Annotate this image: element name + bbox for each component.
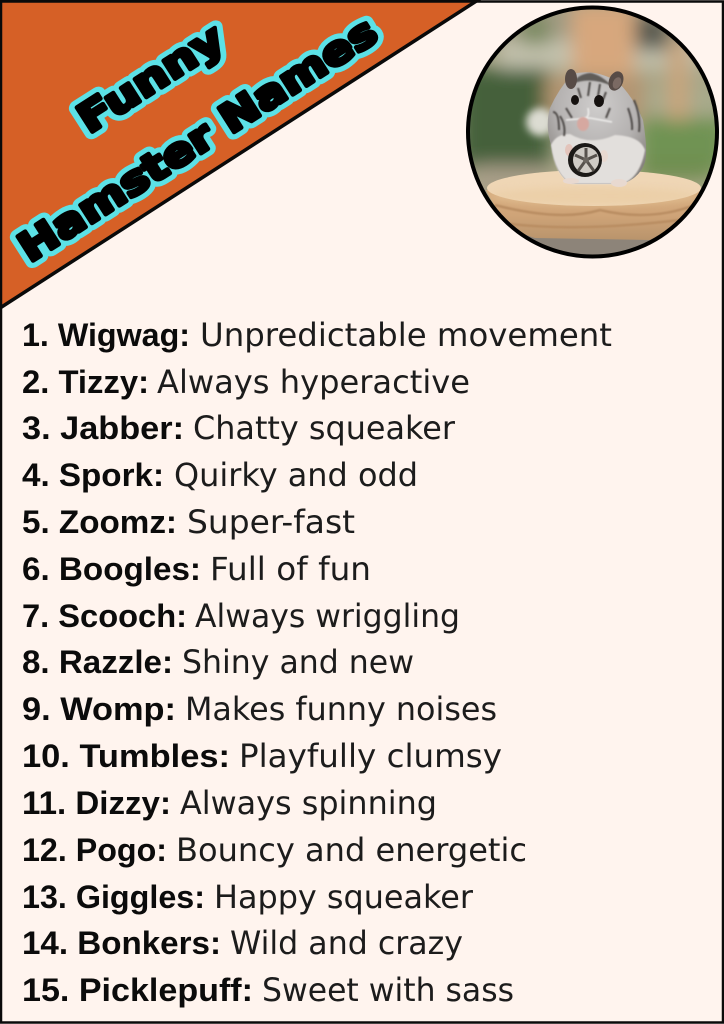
item 1: 1. Wigwag: <box>22 317 190 353</box>
item 9: Makes funny noises <box>185 690 497 728</box>
item 6: Full of fun <box>210 550 371 588</box>
title <box>10 9 386 271</box>
item 15: Sweet with sass <box>262 971 514 1009</box>
photo background <box>470 10 715 208</box>
item 4: Quirky and odd <box>174 456 418 494</box>
eyes and nose <box>571 95 604 131</box>
photo: hamster on a wooden platform <box>460 0 724 265</box>
item 6 <box>22 550 371 588</box>
item 2: Always hyperactive <box>157 363 470 401</box>
item 4 <box>22 456 418 494</box>
item 9: 9. Womp: <box>22 691 176 727</box>
item 7 <box>22 597 460 635</box>
item 8: Shiny and new <box>182 643 414 681</box>
item 7: 7. Scooch: <box>22 598 187 634</box>
hamster <box>548 69 646 187</box>
item 6: 6. Boogles: <box>22 551 201 587</box>
title line: Hamster Names: Hamster Names <box>10 9 386 271</box>
paws and feet <box>563 144 627 187</box>
item 13 <box>22 878 474 916</box>
item 2: 2. Tizzy: <box>22 364 149 400</box>
item 5: Super-fast <box>187 503 355 541</box>
item 1 <box>22 316 612 354</box>
list of hamster names <box>22 316 612 1009</box>
item 1: Unpredictable movement <box>200 316 612 354</box>
item 14: Wild and crazy <box>230 924 463 962</box>
ears <box>565 69 624 91</box>
item 9 <box>22 690 497 728</box>
item 12: Bouncy and energetic <box>176 831 527 869</box>
item 15 <box>22 971 514 1009</box>
wooden platform <box>486 170 702 262</box>
item 15: 15. Picklepuff: <box>22 972 253 1008</box>
item 4: 4. Spork: <box>22 457 164 493</box>
item 13: 13. Giggles: <box>22 879 205 915</box>
item 10: 10. Tumbles: <box>22 738 230 774</box>
item 14 <box>22 924 463 962</box>
toy wheel <box>568 143 602 177</box>
item 3: Chatty squeaker <box>193 409 456 447</box>
photo ring <box>468 8 717 256</box>
item 5: 5. Zoomz: <box>22 504 177 540</box>
item 11: Always spinning <box>180 784 437 822</box>
item 14: 14. Bonkers: <box>22 925 221 961</box>
item 7: Always wriggling <box>195 597 460 635</box>
title line: Funny: Funny <box>70 15 232 143</box>
title line: Hamster Names: Hamster Names <box>10 9 386 271</box>
orange corner banner <box>0 0 478 308</box>
item 3: 3. Jabber: <box>22 410 184 446</box>
item 5 <box>22 503 355 541</box>
title line: Funny: Funny <box>70 15 232 143</box>
item 12: 12. Pogo: <box>22 832 167 868</box>
item 8 <box>22 643 414 681</box>
item 12 <box>22 831 527 869</box>
item 13: Happy squeaker <box>214 878 474 916</box>
item 2 <box>22 363 470 401</box>
item 3 <box>22 409 456 447</box>
item 11: 11. Dizzy: <box>22 785 171 821</box>
item 10: Playfully clumsy <box>239 737 502 775</box>
item 11 <box>22 784 437 822</box>
item 8: 8. Razzle: <box>22 644 173 680</box>
item 10 <box>22 737 502 775</box>
